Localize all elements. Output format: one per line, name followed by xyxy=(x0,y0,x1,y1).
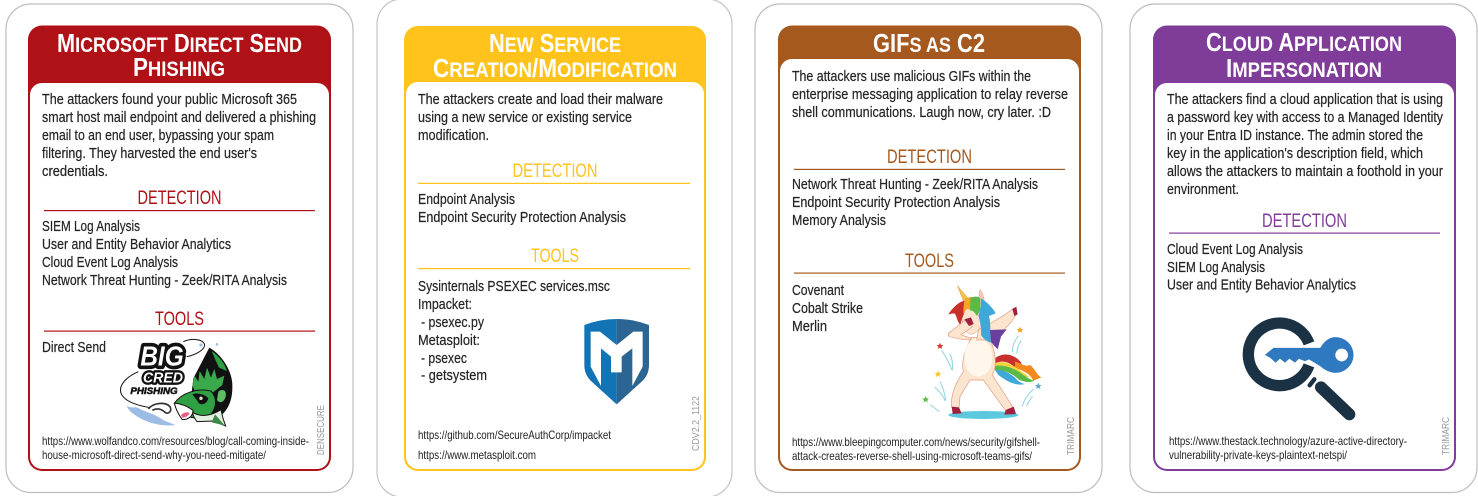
detection list: Network Threat Hunting - Zeek/RITA Analysis xyxy=(42,272,287,289)
tools list xyxy=(418,278,610,384)
description: shell communications. Laugh now, cry later. :D xyxy=(792,104,1051,121)
title: GIFS AS C2 xyxy=(873,28,985,58)
detection heading: DETECTION xyxy=(887,147,972,168)
tools heading: TOOLS xyxy=(155,309,204,330)
detection list: Memory Analysis xyxy=(792,212,886,229)
icon: Big Cred Phishing fish logo xyxy=(120,339,232,426)
reference links: https://www.wolfandco.com/resources/blog/call-coming-inside- xyxy=(42,434,309,448)
vertical tag: TRIMARC xyxy=(1066,417,1077,455)
panel: Microsoft Direct Send Phishing card xyxy=(6,4,353,492)
detection list xyxy=(1167,241,1356,294)
detection list: Network Threat Hunting - Zeek/RITA Analysis xyxy=(792,176,1038,193)
reference links xyxy=(42,434,309,462)
description: using a new service or existing service xyxy=(418,109,632,126)
tools list: Cobalt Strike xyxy=(792,300,863,317)
title: MICROSOFT DIRECT SEND xyxy=(57,28,302,58)
detection list: User and Entity Behavior Analytics xyxy=(1167,276,1356,294)
reference links xyxy=(1169,434,1407,462)
reference links: vulnerability-private-keys-plaintext-netspi/ xyxy=(1169,448,1348,462)
detection list xyxy=(42,218,287,289)
detection list xyxy=(418,191,626,226)
tools list: - psexec.py xyxy=(421,314,484,331)
description xyxy=(792,68,1068,121)
reference links: https://www.metasploit.com xyxy=(418,448,536,462)
tools list: Merlin xyxy=(792,318,827,335)
icon: Big Cred Phishing fish logo: BIG xyxy=(140,341,184,372)
reference links: attack-creates-reverse-shell-using-microsoft-teams-gifs/ xyxy=(792,449,1033,463)
description: modification. xyxy=(418,127,489,144)
reference links: https://www.bleepingcomputer.com/news/security/gifshell- xyxy=(792,435,1040,449)
detection list: User and Entity Behavior Analytics xyxy=(42,236,231,253)
tools heading: TOOLS xyxy=(905,251,954,272)
title: PHISHING xyxy=(133,52,225,82)
title xyxy=(433,28,677,83)
detection list: SIEM Log Analysis xyxy=(42,218,140,235)
reference links xyxy=(792,435,1040,463)
title: CREATION/MODIFICATION xyxy=(433,53,677,83)
title xyxy=(57,28,302,82)
description xyxy=(1167,91,1443,198)
description: filtering. They harvested the end user's xyxy=(42,145,257,162)
detection list xyxy=(792,176,1038,229)
reference links: https://www.thestack.technology/azure-active-directory- xyxy=(1169,434,1407,448)
reference links: house-microsoft-direct-send-why-you-need-mitigate/ xyxy=(42,448,267,462)
title: CLOUD APPLICATION xyxy=(1206,27,1402,57)
detection heading: DETECTION xyxy=(1262,211,1347,232)
vertical tag: CDV2.2_1122 xyxy=(691,396,702,451)
description: The attackers create and load their malware xyxy=(418,91,663,108)
title xyxy=(1206,27,1402,83)
reference links xyxy=(418,428,612,462)
title: NEW SERVICE xyxy=(489,28,621,58)
description: credentials. xyxy=(42,163,108,180)
description xyxy=(42,91,316,180)
description: email to an end user, bypassing your spam xyxy=(42,127,274,144)
description: environment. xyxy=(1167,181,1239,198)
tools list: Metasploit: xyxy=(418,332,480,349)
tools list: - getsystem xyxy=(421,367,487,384)
detection heading: DETECTION xyxy=(138,188,222,209)
icon: Big Cred Phishing fish logo: PHISHING xyxy=(130,386,178,396)
vertical tag: TRIMARC xyxy=(1441,417,1452,455)
description: key in the application's description field, which xyxy=(1167,145,1423,162)
panel: GIFs as C2 card xyxy=(755,4,1102,492)
detection heading: DETECTION xyxy=(512,161,598,182)
tools list: Covenant xyxy=(792,282,845,299)
panel: New Service Creation/Modification card xyxy=(377,0,732,496)
detection list: Cloud Event Log Analysis xyxy=(42,254,178,271)
description: enterprise messaging application to relay reverse xyxy=(792,86,1068,103)
tools list: Sysinternals PSEXEC services.msc xyxy=(418,278,610,295)
description xyxy=(418,91,663,144)
description: The attackers found your public Microsoft 365 xyxy=(42,91,297,108)
detection list: Endpoint Security Protection Analysis xyxy=(792,194,1000,211)
detection list: Endpoint Security Protection Analysis xyxy=(418,209,626,226)
description: in your Entra ID instance. The admin stored the xyxy=(1167,127,1423,144)
description: The attackers use malicious GIFs within the xyxy=(792,68,1031,85)
tools heading: TOOLS xyxy=(531,246,579,267)
tools list: Impacket: xyxy=(418,296,472,313)
icon: dabbing unicorn xyxy=(922,286,1042,419)
icon: magnifier and key xyxy=(1248,323,1354,414)
tools list xyxy=(792,282,863,335)
panel: Cloud Application Impersonation card xyxy=(1130,4,1477,492)
icon: Metasploit shield xyxy=(584,319,649,404)
title: IMPERSONATION xyxy=(1226,53,1382,83)
detection list: Endpoint Analysis xyxy=(418,191,515,208)
description: smart host mail endpoint and delivered a phishing xyxy=(42,109,316,126)
reference links: https://github.com/SecureAuthCorp/impacket xyxy=(418,428,612,442)
tools list: - psexec xyxy=(421,350,467,367)
detection list: SIEM Log Analysis xyxy=(1167,259,1265,276)
tools list: Direct Send xyxy=(42,339,106,356)
icon: Big Cred Phishing fish logo: CRED xyxy=(143,370,183,386)
vertical tag: DENSECURE xyxy=(316,405,327,455)
detection list: Cloud Event Log Analysis xyxy=(1167,241,1303,258)
